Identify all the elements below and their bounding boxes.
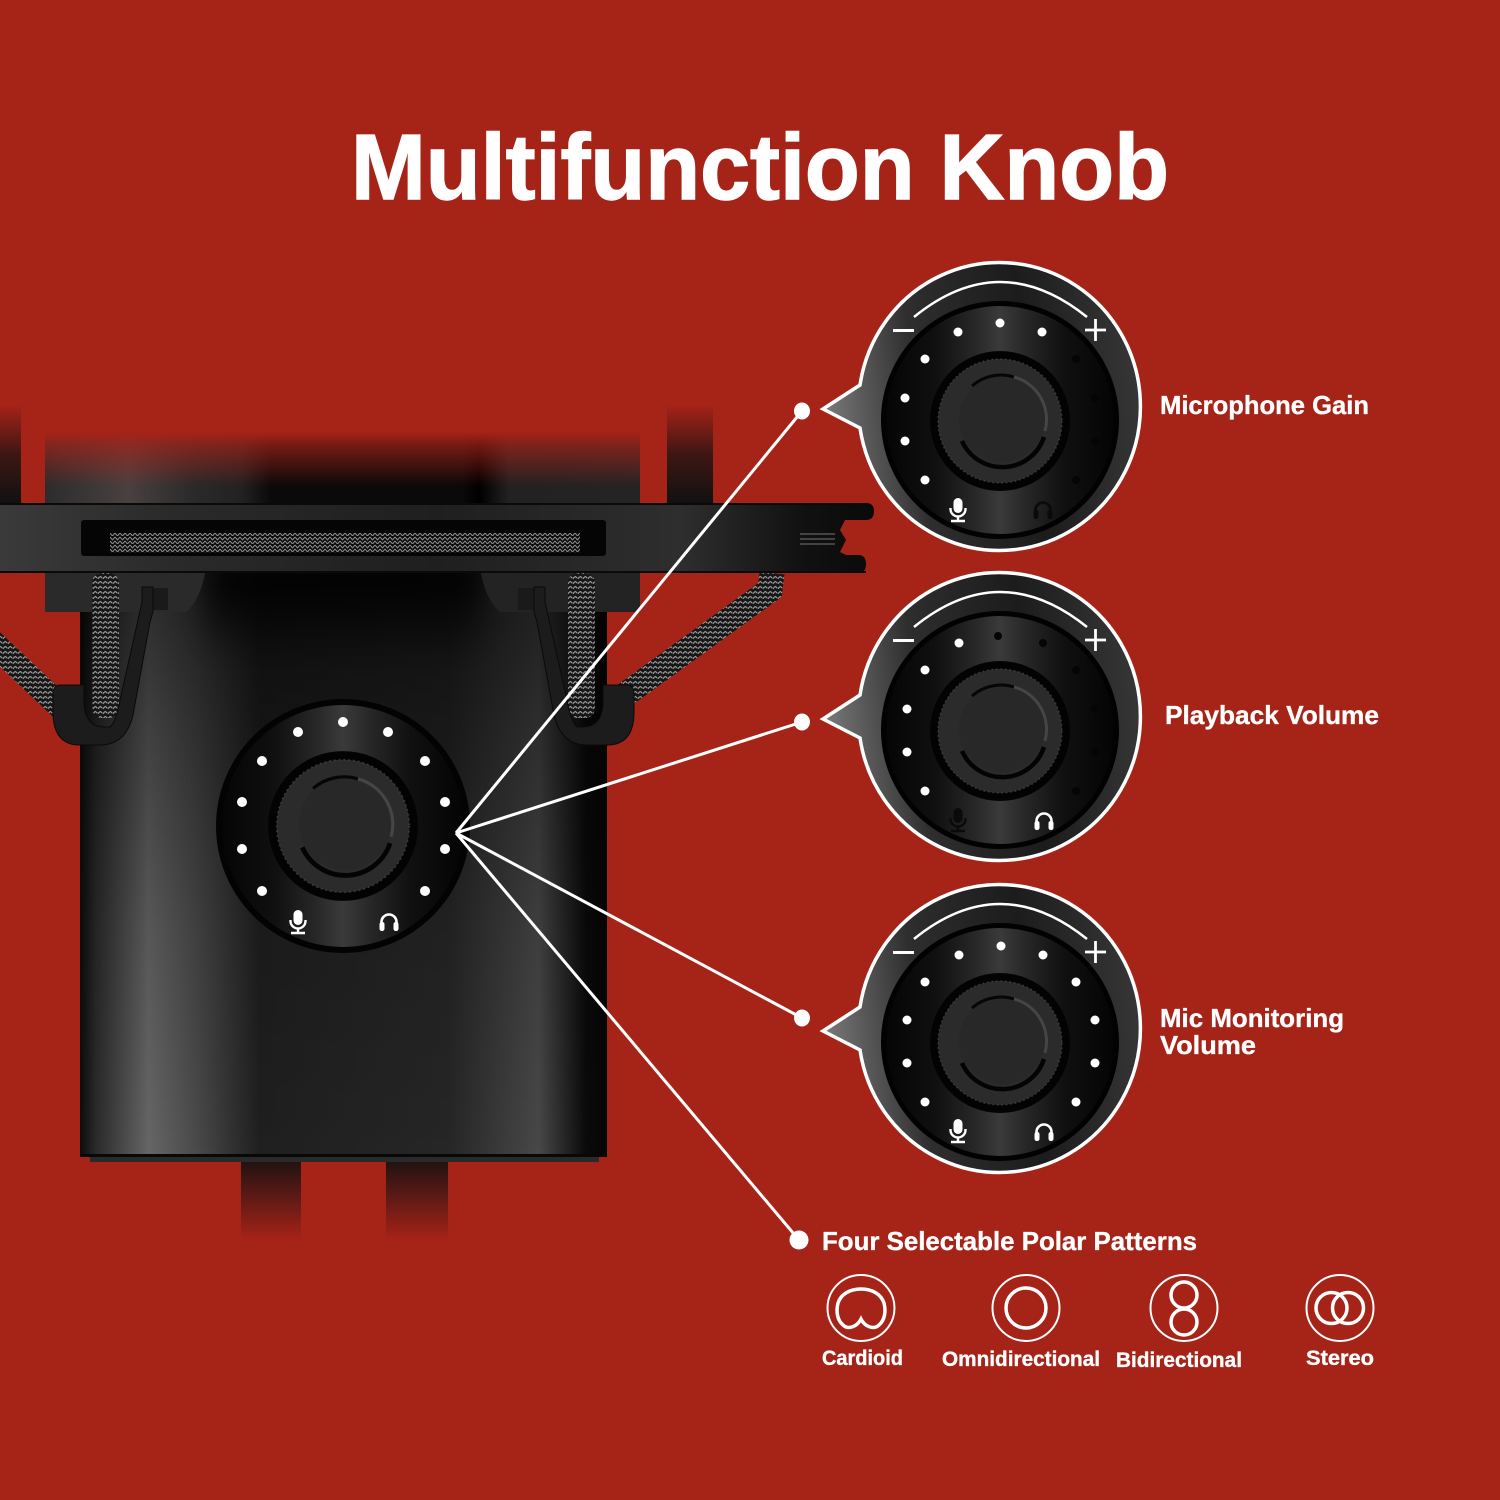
title: Multifunction Knob [351, 115, 1169, 219]
diagonal suspension cords [0, 573, 772, 708]
heading: polar patterns: Four Selectable Polar Patterns [822, 1226, 1197, 1256]
icon: stereo [1306, 1275, 1374, 1341]
label: playback volume: Playback Volume [1165, 700, 1379, 730]
microphone body [80, 560, 607, 1162]
label: mic monitoring volume: Mic Monitoring [1160, 1003, 1344, 1033]
callout: microphone gain dial [823, 262, 1140, 550]
label: cardioid: Cardioid [822, 1347, 903, 1370]
icon: cardioid [828, 1275, 894, 1341]
shock mount ring [0, 503, 874, 573]
main control dial on microphone [216, 699, 470, 953]
callout: mic monitoring volume dial [823, 884, 1140, 1172]
label: stereo: Stereo [1306, 1347, 1374, 1370]
icon: bidirectional [1150, 1275, 1218, 1341]
right clip [534, 587, 634, 745]
microphone illustration [0, 405, 874, 1240]
icon: omnidirectional [992, 1275, 1060, 1341]
callout: playback volume dial [823, 572, 1140, 860]
faded microphone head above shock mount [0, 405, 713, 505]
label: bidirectional: Bidirectional [1116, 1349, 1242, 1372]
label: mic monitoring volume [1160, 1003, 1344, 1060]
collar below shock mount [45, 573, 640, 612]
vertical suspension cords [92, 573, 595, 718]
label: mic monitoring volume: Volume [1160, 1030, 1256, 1060]
left clip [53, 587, 153, 745]
output legs [241, 1160, 448, 1240]
label: omnidirectional: Omnidirectional [942, 1348, 1100, 1371]
leader lines [456, 402, 810, 1250]
label: microphone gain: Microphone Gain [1160, 390, 1369, 420]
